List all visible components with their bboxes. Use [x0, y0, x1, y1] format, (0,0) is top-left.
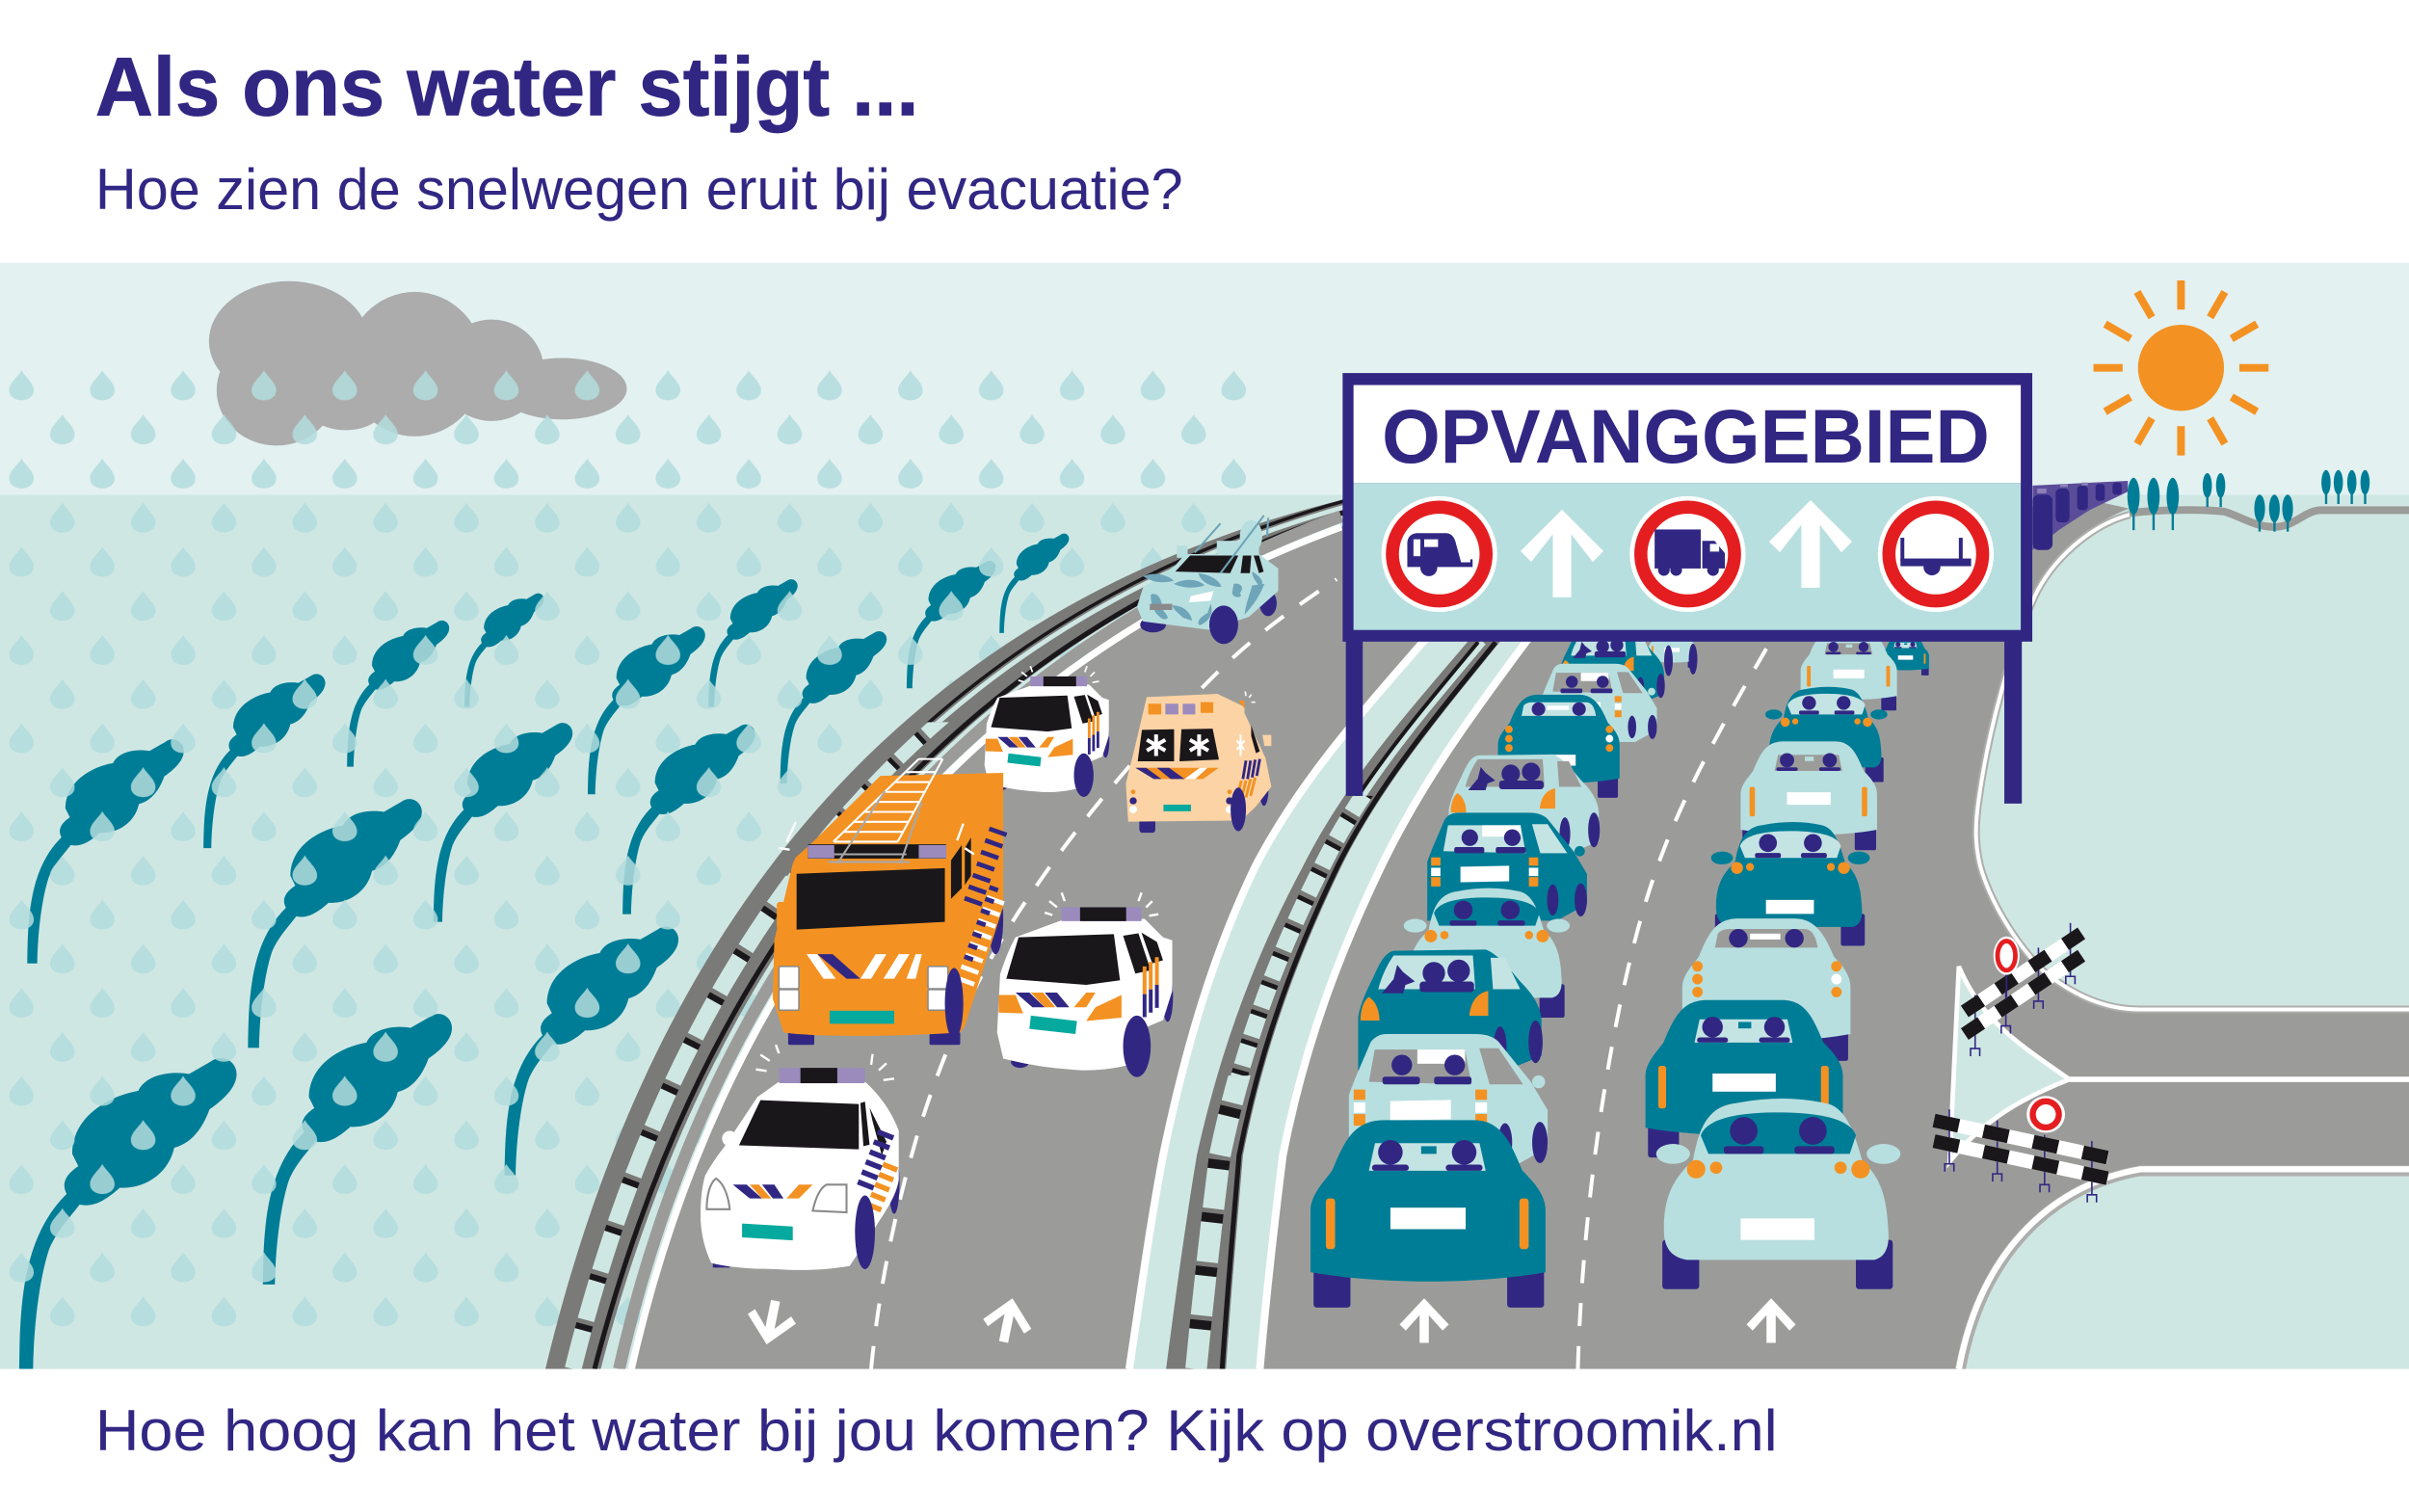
car — [1765, 687, 1888, 783]
left crash barrier — [545, 499, 1344, 1369]
tree 13 — [505, 927, 678, 1176]
ambulance — [1125, 691, 1271, 833]
tree 9 — [622, 725, 755, 915]
overhead sign gantry — [1342, 373, 2032, 804]
tree 6 — [434, 723, 572, 922]
car — [1649, 630, 1697, 676]
road centre dashes: left carriageway — [871, 579, 1337, 1369]
arrow up — [1521, 510, 1603, 597]
police car far — [985, 666, 1109, 797]
traffic queue: left lane — [1310, 630, 1697, 1308]
car — [1427, 812, 1587, 920]
road arrow: down — [743, 1296, 800, 1349]
tree 14 — [263, 1014, 452, 1285]
sign frame — [1342, 373, 2032, 642]
car — [1498, 695, 1620, 798]
road surface — [631, 461, 2409, 1369]
car — [1740, 741, 1877, 850]
left road edge line — [620, 517, 1341, 1369]
road centre dashes: right carriageway — [1577, 646, 1768, 1369]
sign text: OPVANGGEBIED — [1382, 394, 1990, 479]
tree 1 — [27, 739, 184, 964]
road arrow: up right lane — [1747, 1298, 1796, 1343]
tree 3 — [347, 621, 449, 767]
tree 11 — [907, 561, 995, 688]
car — [1682, 918, 1850, 1061]
tree 5 — [248, 799, 422, 1048]
horizon poplars — [2128, 470, 2369, 532]
tree 8 — [708, 579, 798, 706]
car — [1711, 822, 1869, 946]
rain cloud — [209, 281, 627, 445]
rain drops — [0, 365, 1259, 1337]
exit road centre line — [2070, 1077, 2409, 1081]
prohibition: trailer — [1878, 496, 1994, 612]
car — [1404, 889, 1570, 1018]
prohibition: caravan — [1382, 496, 1497, 612]
arrow up — [1769, 500, 1852, 588]
sun — [2094, 280, 2268, 456]
car — [1646, 1000, 1842, 1157]
car — [1656, 1099, 1900, 1289]
no-entry sign lower — [2026, 1096, 2065, 1133]
distant queue of cars — [2032, 481, 2128, 550]
dike road on the horizon — [2130, 510, 2409, 527]
traffic queue: right lane — [1646, 634, 1929, 1289]
army vehicle — [1137, 516, 1279, 644]
car — [1349, 1034, 1548, 1168]
fire truck — [773, 759, 1003, 1045]
gantry post left — [1346, 630, 1363, 796]
tree 2 — [203, 674, 326, 848]
land edge: lower — [1959, 1169, 2409, 1369]
police car near — [701, 1045, 900, 1270]
gantry post right — [2004, 630, 2022, 804]
tree 4 — [464, 594, 543, 706]
car — [1449, 755, 1600, 853]
title: Als ons water stijgt ... — [95, 41, 918, 134]
central median — [1125, 642, 1531, 1369]
road arrow: up middle lane — [1399, 1298, 1449, 1343]
exit gore island — [1949, 967, 2070, 1161]
land edge: upper — [1976, 515, 2409, 1010]
car — [1882, 638, 1929, 676]
road arrow: up left lane — [979, 1293, 1037, 1347]
road closure: lower barrier — [1934, 1109, 2108, 1203]
footer white band — [0, 1369, 2409, 1512]
sign lower panel — [1354, 483, 2021, 630]
police van near — [997, 892, 1173, 1077]
car — [1310, 1120, 1546, 1308]
car — [1358, 949, 1543, 1071]
car — [1541, 664, 1656, 742]
car — [1559, 633, 1665, 702]
tree 15 — [19, 1058, 237, 1369]
tree 12 — [999, 534, 1069, 633]
no-entry sign upper — [1994, 937, 2020, 998]
scene background: water and land — [0, 494, 2409, 1369]
scene background: sky — [0, 263, 2409, 494]
flooded trees — [19, 534, 1069, 1369]
subtitle: Hoe zien de snelwegen eruit bij evacuatie? — [95, 156, 1183, 222]
sign white panel — [1354, 385, 2021, 483]
tree 7 — [588, 626, 705, 794]
prohibition: lorry — [1629, 496, 1746, 612]
footer text: Hoe hoog kan het water bij jou komen? Kijk op overstroomik.nl — [95, 1397, 1778, 1463]
median white lines — [1129, 530, 1613, 1369]
median barrier — [1166, 642, 1500, 1369]
road closure: upper barrier — [1965, 923, 2081, 1056]
tree 10 — [781, 631, 887, 783]
car — [1801, 634, 1897, 710]
ladder — [834, 759, 942, 841]
